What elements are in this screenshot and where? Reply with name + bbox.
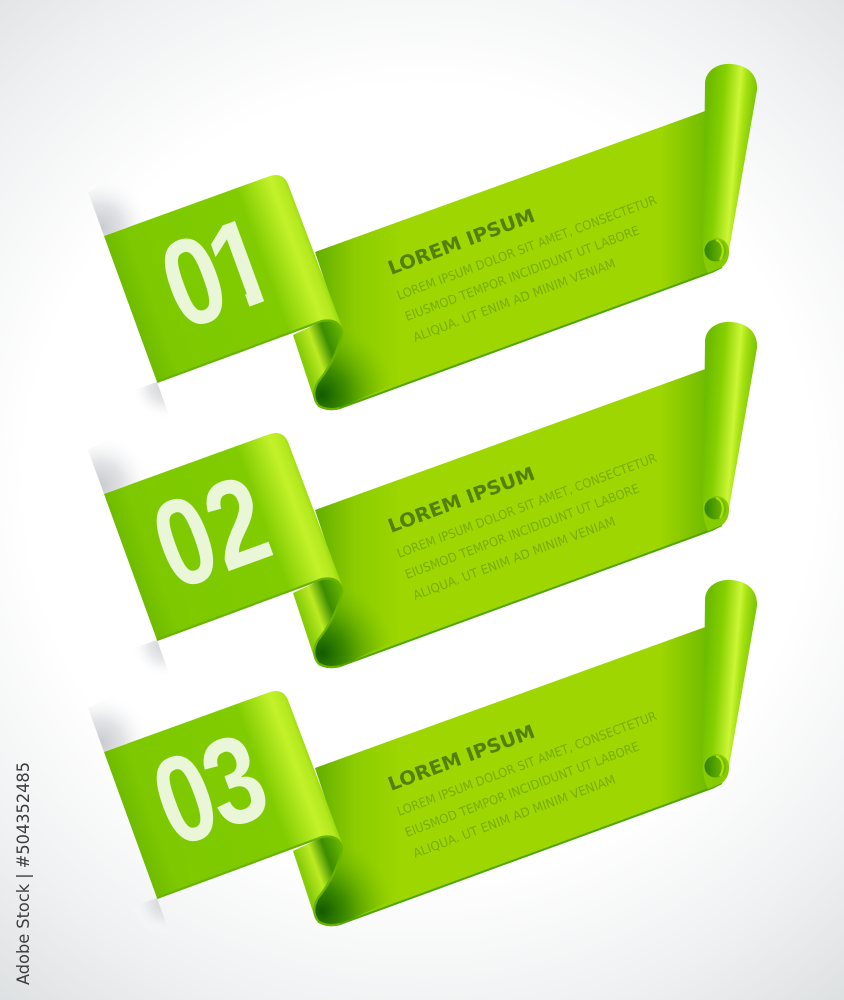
- heading: LOREM IPSUM: [385, 205, 538, 280]
- text panel: [314, 110, 722, 409]
- number panel: [104, 691, 342, 898]
- body text: EIUSMOD TEMPOR INCIDIDUNT UT LABORE: [403, 481, 641, 582]
- folded underside: [293, 578, 342, 657]
- rolled end: [703, 64, 757, 273]
- slit shadows: [88, 418, 170, 694]
- fold rim: [157, 836, 342, 925]
- body text: EIUSMOD TEMPOR INCIDIDUNT UT LABORE: [403, 223, 641, 324]
- rolled end: [703, 580, 757, 789]
- number 01: 1: [191, 190, 291, 339]
- body text: [395, 708, 659, 861]
- body text: LOREM IPSUM DOLOR SIT AMET, CONSECTETUR: [395, 192, 659, 303]
- folded underside: [293, 320, 342, 399]
- body text: [395, 450, 659, 603]
- body text: EIUSMOD TEMPOR INCIDIDUNT UT LABORE: [403, 739, 641, 840]
- number panel: [104, 433, 342, 640]
- heading: LOREM IPSUM: [385, 721, 538, 796]
- text panel: [314, 368, 722, 667]
- folded underside: [293, 836, 342, 915]
- number panel: [104, 175, 342, 382]
- number 02: 02: [136, 448, 286, 616]
- number 01: 0: [144, 207, 244, 356]
- slit shadows: [88, 676, 170, 952]
- ribbon 03: [88, 580, 757, 952]
- number 01: [164, 221, 264, 324]
- slit shadows: [88, 160, 170, 436]
- ribbon 01: [88, 64, 757, 436]
- heading: LOREM IPSUM: [385, 463, 538, 538]
- body text: ALIQUA. UT ENIM AD MINIM VENIAM: [411, 255, 617, 345]
- number 03: 03: [136, 706, 284, 873]
- fold rim: [157, 578, 342, 667]
- body text: ALIQUA. UT ENIM AD MINIM VENIAM: [411, 513, 617, 603]
- body text: LOREM IPSUM DOLOR SIT AMET, CONSECTETUR: [395, 450, 659, 561]
- ribbon 02: [88, 322, 757, 694]
- body text: LOREM IPSUM DOLOR SIT AMET, CONSECTETUR: [395, 708, 659, 819]
- rolled end: [703, 322, 757, 531]
- side credit text: Adobe Stock | #504352485: [14, 762, 34, 985]
- text panel: [314, 626, 722, 925]
- fold rim: [157, 320, 342, 409]
- body text: ALIQUA. UT ENIM AD MINIM VENIAM: [411, 771, 617, 861]
- body text: [395, 192, 659, 345]
